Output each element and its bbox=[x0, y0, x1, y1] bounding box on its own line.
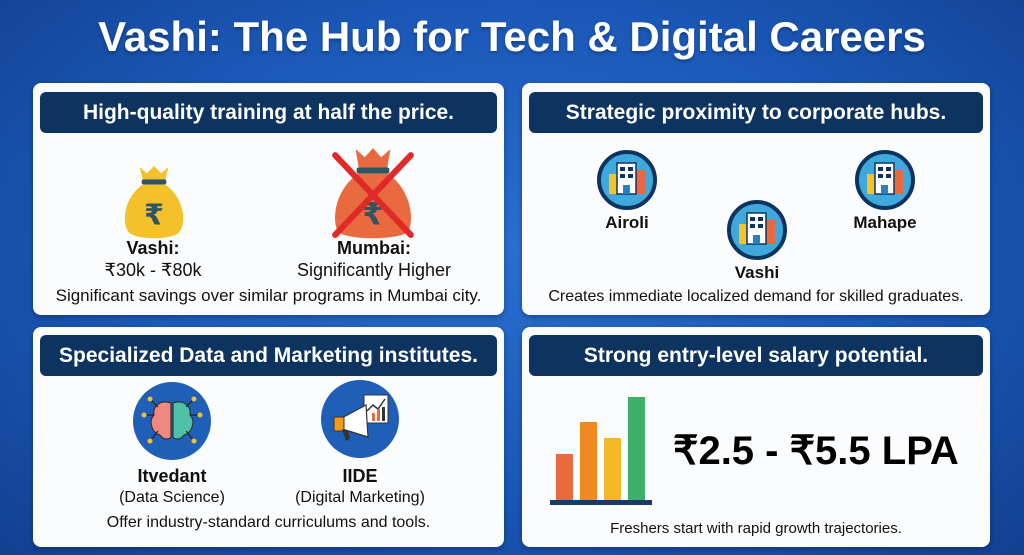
icon: brain bbox=[133, 382, 211, 460]
icon: vashi building bbox=[727, 200, 787, 260]
caption: price: Significant savings over similar programs in Mumbai city. bbox=[56, 286, 481, 305]
panel: salary bbox=[522, 327, 990, 547]
label: itvedant: Itvedant bbox=[137, 466, 206, 486]
label: iide: (Digital Marketing) bbox=[295, 489, 425, 506]
label: itvedant: (Data Science) bbox=[119, 489, 225, 506]
icon: mahape building bbox=[855, 150, 915, 210]
header: proximity: Strategic proximity to corporate hubs. bbox=[566, 101, 946, 124]
panel: institutes bbox=[33, 327, 504, 547]
icon: mumbai money bag crossed bbox=[332, 148, 414, 238]
label: vashi: Vashi bbox=[735, 263, 779, 282]
panel: proximity bbox=[522, 83, 990, 315]
text: mumbai price bbox=[297, 238, 451, 280]
label: airoli: Airoli bbox=[605, 213, 649, 232]
title: Vashi: The Hub for Tech & Digital Careers bbox=[98, 13, 926, 60]
bar chart bbox=[550, 397, 652, 505]
label: itvedant bbox=[119, 466, 225, 506]
icon: vashi money bag bbox=[124, 166, 184, 238]
panel: price bbox=[33, 83, 504, 315]
text: mumbai price: Significantly Higher bbox=[297, 260, 451, 280]
header: price bbox=[40, 92, 497, 133]
icon: airoli building bbox=[597, 150, 657, 210]
caption: salary: Freshers start with rapid growth trajectories. bbox=[610, 520, 902, 537]
label: iide bbox=[295, 466, 425, 506]
header: institutes: Specialized Data and Marketing institutes. bbox=[59, 344, 478, 367]
icon: mumbai money bag crossed: ₹ bbox=[362, 198, 384, 232]
text: vashi price: ₹30k - ₹80k bbox=[105, 260, 201, 280]
header: salary bbox=[529, 335, 983, 376]
label: mahape: Mahape bbox=[853, 213, 917, 232]
icon: vashi money bag: ₹ bbox=[144, 200, 164, 232]
caption: proximity: Creates immediate localized demand for skilled graduates. bbox=[548, 288, 964, 305]
icon: megaphone bbox=[321, 380, 399, 458]
header: salary: Strong entry-level salary potential. bbox=[584, 344, 928, 367]
text: mumbai price: Mumbai: bbox=[337, 238, 411, 258]
text: vashi price: Vashi: bbox=[126, 238, 180, 258]
header: price: High-quality training at half the price. bbox=[83, 101, 454, 124]
header: institutes bbox=[40, 335, 497, 376]
label: iide: IIDE bbox=[342, 466, 378, 486]
text: vashi price bbox=[105, 238, 202, 280]
header: proximity bbox=[529, 92, 983, 133]
salary figure: ₹2.5 - ₹5.5 LPA bbox=[673, 429, 959, 473]
caption: institutes: Offer industry-standard curriculums and tools. bbox=[107, 514, 430, 531]
